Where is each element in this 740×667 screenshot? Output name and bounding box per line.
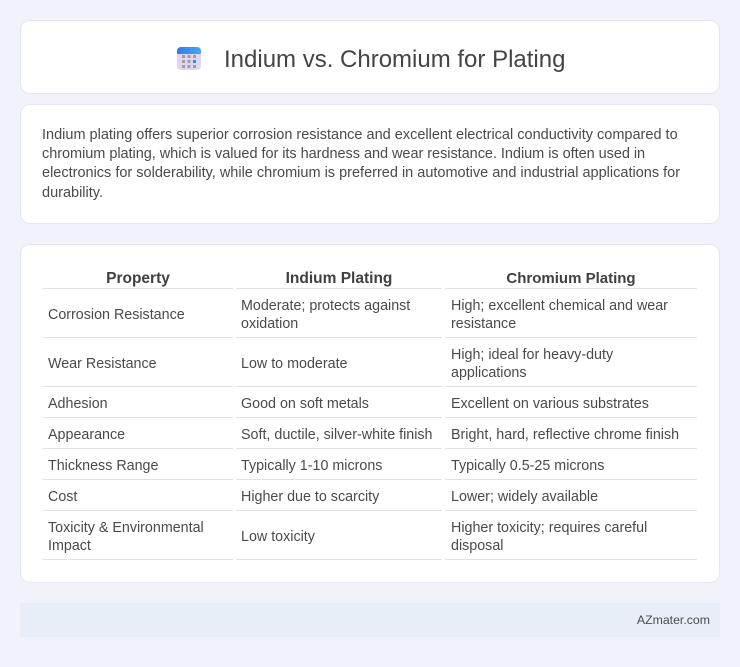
row: adhesion	[48, 396, 649, 412]
row: adhesion: Adhesion	[48, 396, 108, 412]
summary text: chromium plating, which is valued for its hardness and wear resistance. Indium is often used in	[42, 146, 645, 162]
footer bar	[20, 603, 720, 637]
row: toxicity and environmental impact: Low toxicity	[241, 529, 315, 545]
row: wear resistance: Wear Resistance	[48, 356, 157, 372]
row: appearance: Soft, ductile, silver-white finish	[241, 427, 432, 443]
row: corrosion resistance: High; excellent chemical and wear	[451, 298, 668, 314]
panel: comparison table card	[20, 244, 720, 583]
row: cost: Cost	[48, 489, 77, 505]
row: toxicity and environmental impact: Impact	[48, 538, 91, 554]
title: Indium vs. Chromium for Plating	[224, 46, 565, 73]
header: chromium plating: Chromium Plating	[506, 270, 636, 287]
icon: calendar	[177, 47, 201, 70]
row: corrosion resistance	[48, 298, 668, 332]
row: thickness range	[48, 458, 604, 474]
summary text	[42, 127, 680, 201]
row: cost: Higher due to scarcity	[241, 489, 379, 505]
row: wear resistance: Low to moderate	[241, 356, 348, 372]
footer brand: AZmater.com	[637, 613, 710, 627]
row: appearance: Appearance	[48, 427, 125, 443]
row: cost	[48, 489, 598, 505]
header: property: Property	[106, 270, 170, 287]
row: corrosion resistance: Moderate; protects against	[241, 298, 410, 314]
row: wear resistance: High; ideal for heavy-duty	[451, 347, 613, 363]
summary text: electronics for solderability, while chromium is preferred in automotive and industrial applications for	[42, 165, 680, 181]
row: toxicity and environmental impact: disposal	[451, 538, 503, 554]
summary text: durability.	[42, 185, 103, 201]
row: toxicity and environmental impact: Toxicity & Environmental	[48, 520, 204, 536]
row: thickness range: Typically 1-10 microns	[241, 458, 382, 474]
row: toxicity and environmental impact	[48, 520, 647, 554]
row: adhesion: Excellent on various substrates	[451, 396, 649, 412]
row: corrosion resistance: oxidation	[241, 316, 298, 332]
row: cost: Lower; widely available	[451, 489, 598, 505]
row: appearance	[48, 427, 679, 443]
row: adhesion: Good on soft metals	[241, 396, 369, 412]
summary text: Indium plating offers superior corrosion resistance and excellent electrical conductivity compared to	[42, 127, 678, 143]
row: wear resistance	[48, 347, 614, 381]
row: wear resistance: applications	[451, 365, 527, 381]
row: appearance: Bright, hard, reflective chrome finish	[451, 427, 679, 443]
row: thickness range: Typically 0.5-25 microns	[451, 458, 604, 474]
panel: summary card	[20, 104, 720, 224]
row: thickness range: Thickness Range	[48, 458, 158, 474]
row: toxicity and environmental impact: Higher toxicity; requires careful	[451, 520, 647, 536]
row: corrosion resistance: resistance	[451, 316, 516, 332]
header: indium plating: Indium Plating	[286, 270, 392, 287]
row: corrosion resistance: Corrosion Resistance	[48, 307, 185, 323]
panel: title card	[20, 20, 720, 94]
